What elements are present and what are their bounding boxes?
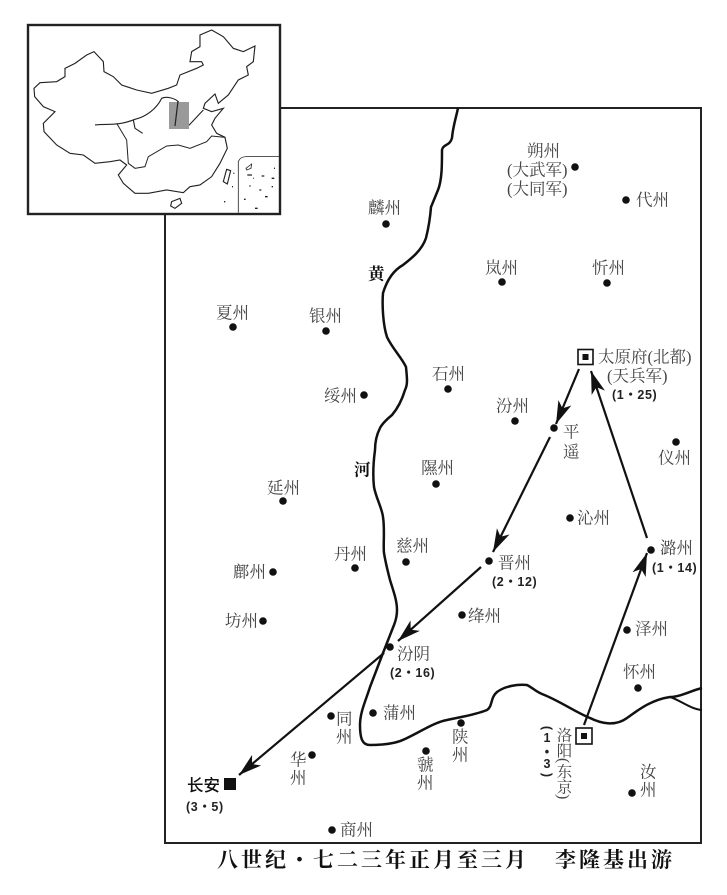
place: Chang'an: [186, 776, 236, 814]
place: Jiangzhou: 绛州: [468, 606, 501, 626]
place: Luoyang: [540, 726, 592, 799]
place: Luzhou: 潞州: [660, 538, 693, 558]
place: Shuozhou: 朔州: [527, 142, 560, 160]
place: Luoyang: 洛阳(东京): [554, 727, 572, 799]
place: Xiazhou: [216, 304, 249, 331]
place: Huazhou: 华: [290, 750, 306, 770]
place: Fangzhou: 坊州: [225, 612, 258, 630]
place: Shuozhou: (大同军): [507, 180, 568, 198]
place: Xiazhou: 夏州: [216, 304, 249, 322]
place: Suizhou: 绥州: [324, 386, 357, 406]
place: Chang'an: (3・5): [186, 800, 224, 814]
place: Xizhou: 隰州: [421, 458, 454, 478]
place: Pingyao: 平: [563, 422, 580, 442]
place: Luoyang: 1: [544, 731, 551, 745]
place: Lanzhou: 岚州: [485, 258, 518, 278]
place: Luoyang: •: [545, 745, 549, 759]
place: Jinzhou: [485, 554, 537, 589]
place: Lanzhou: [485, 258, 518, 286]
place: Zezhou: 泽州: [635, 620, 668, 638]
national outline: [34, 30, 255, 193]
place: Xinzhou: 忻州: [592, 258, 625, 278]
route arrow: Jinzhou to Fenyin: [398, 567, 481, 641]
place: Danzhou: 丹州: [334, 544, 367, 564]
place: Taiyuan: (1・25): [612, 388, 657, 402]
route arrow: Luoyang to Luzhou: [584, 553, 647, 725]
place: Yinzhou: [309, 306, 342, 335]
place: Tongzhou: 同: [336, 710, 352, 728]
place: Chang'an: 长安: [187, 776, 220, 795]
river label: Huang: 黄: [368, 264, 387, 284]
place: Shizhou: [432, 364, 465, 393]
place: Daizhou: 代州: [636, 190, 669, 210]
place: Luoyang: 3: [544, 757, 551, 771]
place: Shizhou: 石州: [432, 364, 465, 384]
place: Jinzhou: (2・12): [492, 575, 537, 589]
place: Luoyang: ): [540, 773, 554, 777]
place: Huaizhou: 怀州: [623, 662, 656, 682]
place: Fenzhou: [496, 396, 529, 425]
place: Yizhou: 仪州: [658, 448, 691, 468]
place: Taiyuan: (天兵军): [607, 366, 668, 386]
Hainan: [171, 198, 182, 208]
place: Xizhou: [421, 458, 454, 488]
place: Yizhou: [658, 438, 691, 468]
place: Fenyin: 汾阴: [397, 644, 430, 664]
place: Guozhou: 州: [417, 774, 434, 792]
place: Xinzhou: [592, 258, 625, 287]
highlighted study area: [169, 102, 189, 129]
place: Huaizhou: [623, 662, 656, 692]
Yellow River: [360, 108, 702, 745]
place: Luzhou: (1・14): [652, 561, 697, 575]
place: Taiyuan: [578, 348, 692, 402]
place: Shanzhou: [452, 719, 468, 764]
place: Fenyin: [386, 643, 435, 680]
place: Fuzhou: 鄜州: [233, 562, 266, 582]
route arrow: Pingyao to Jinzhou: [493, 437, 550, 552]
place: Shanzhou: 州: [452, 746, 468, 764]
place: Shuozhou: [507, 142, 579, 198]
place: Shangzhou: 商州: [340, 820, 373, 840]
inset map of China: [28, 25, 280, 214]
place: Ruzhou: 州: [640, 780, 656, 800]
place: Qinzhou: 沁州: [577, 508, 610, 528]
Yangtze River in inset: [117, 123, 225, 168]
place: Fenzhou: 汾州: [496, 396, 529, 416]
title: period: 八世纪・七二三年正月至三月: [217, 848, 529, 872]
place: Danzhou: [334, 544, 367, 572]
place: Linzhou: 麟州: [368, 198, 401, 218]
place: Huazhou: 州: [290, 768, 306, 788]
place: Guozhou: 虢: [417, 756, 434, 774]
river label: He: 河: [354, 460, 371, 480]
place: Guozhou: [417, 747, 434, 792]
title: subject: 李隆基出游: [555, 848, 675, 872]
place: Cizhou: 慈州: [396, 536, 429, 556]
place: Ruzhou: 汝: [640, 762, 657, 782]
place: Taiyuan: 太原府(北都): [598, 348, 692, 366]
place: Linzhou: [368, 198, 401, 228]
place: Tongzhou: 州: [336, 728, 352, 746]
place: Pingyao: 遥: [563, 442, 580, 462]
route arrow: Luzhou to Taiyuan: [591, 371, 647, 538]
main map frame: [165, 108, 701, 843]
place: Jinzhou: 晋州: [498, 554, 531, 572]
river branch: [670, 697, 702, 710]
route arrow: Taiyuan to Pingyao: [556, 369, 579, 424]
place: Yanzhou: 延州: [267, 478, 300, 498]
place: Shanzhou: 陕: [452, 728, 468, 746]
place: Shuozhou: (大武军): [507, 160, 568, 180]
place: Yinzhou: 银州: [309, 306, 342, 326]
Taiwan: [223, 169, 231, 184]
place: Fenyin: (2・16): [390, 666, 435, 680]
place: Huazhou: [290, 750, 316, 788]
route arrow: Fenyin to Chang'an: [239, 653, 384, 775]
place: Puzhou: 蒲州: [383, 704, 416, 722]
place: Luoyang: (: [540, 726, 554, 731]
Yellow River in inset: [95, 97, 203, 133]
place: Cizhou: [396, 536, 429, 566]
place: Luzhou: [647, 538, 697, 575]
place: Pingyao: [550, 422, 580, 462]
place: Ruzhou: [628, 762, 657, 800]
place: Tongzhou: [327, 710, 352, 746]
South China Sea inset: [238, 157, 279, 213]
